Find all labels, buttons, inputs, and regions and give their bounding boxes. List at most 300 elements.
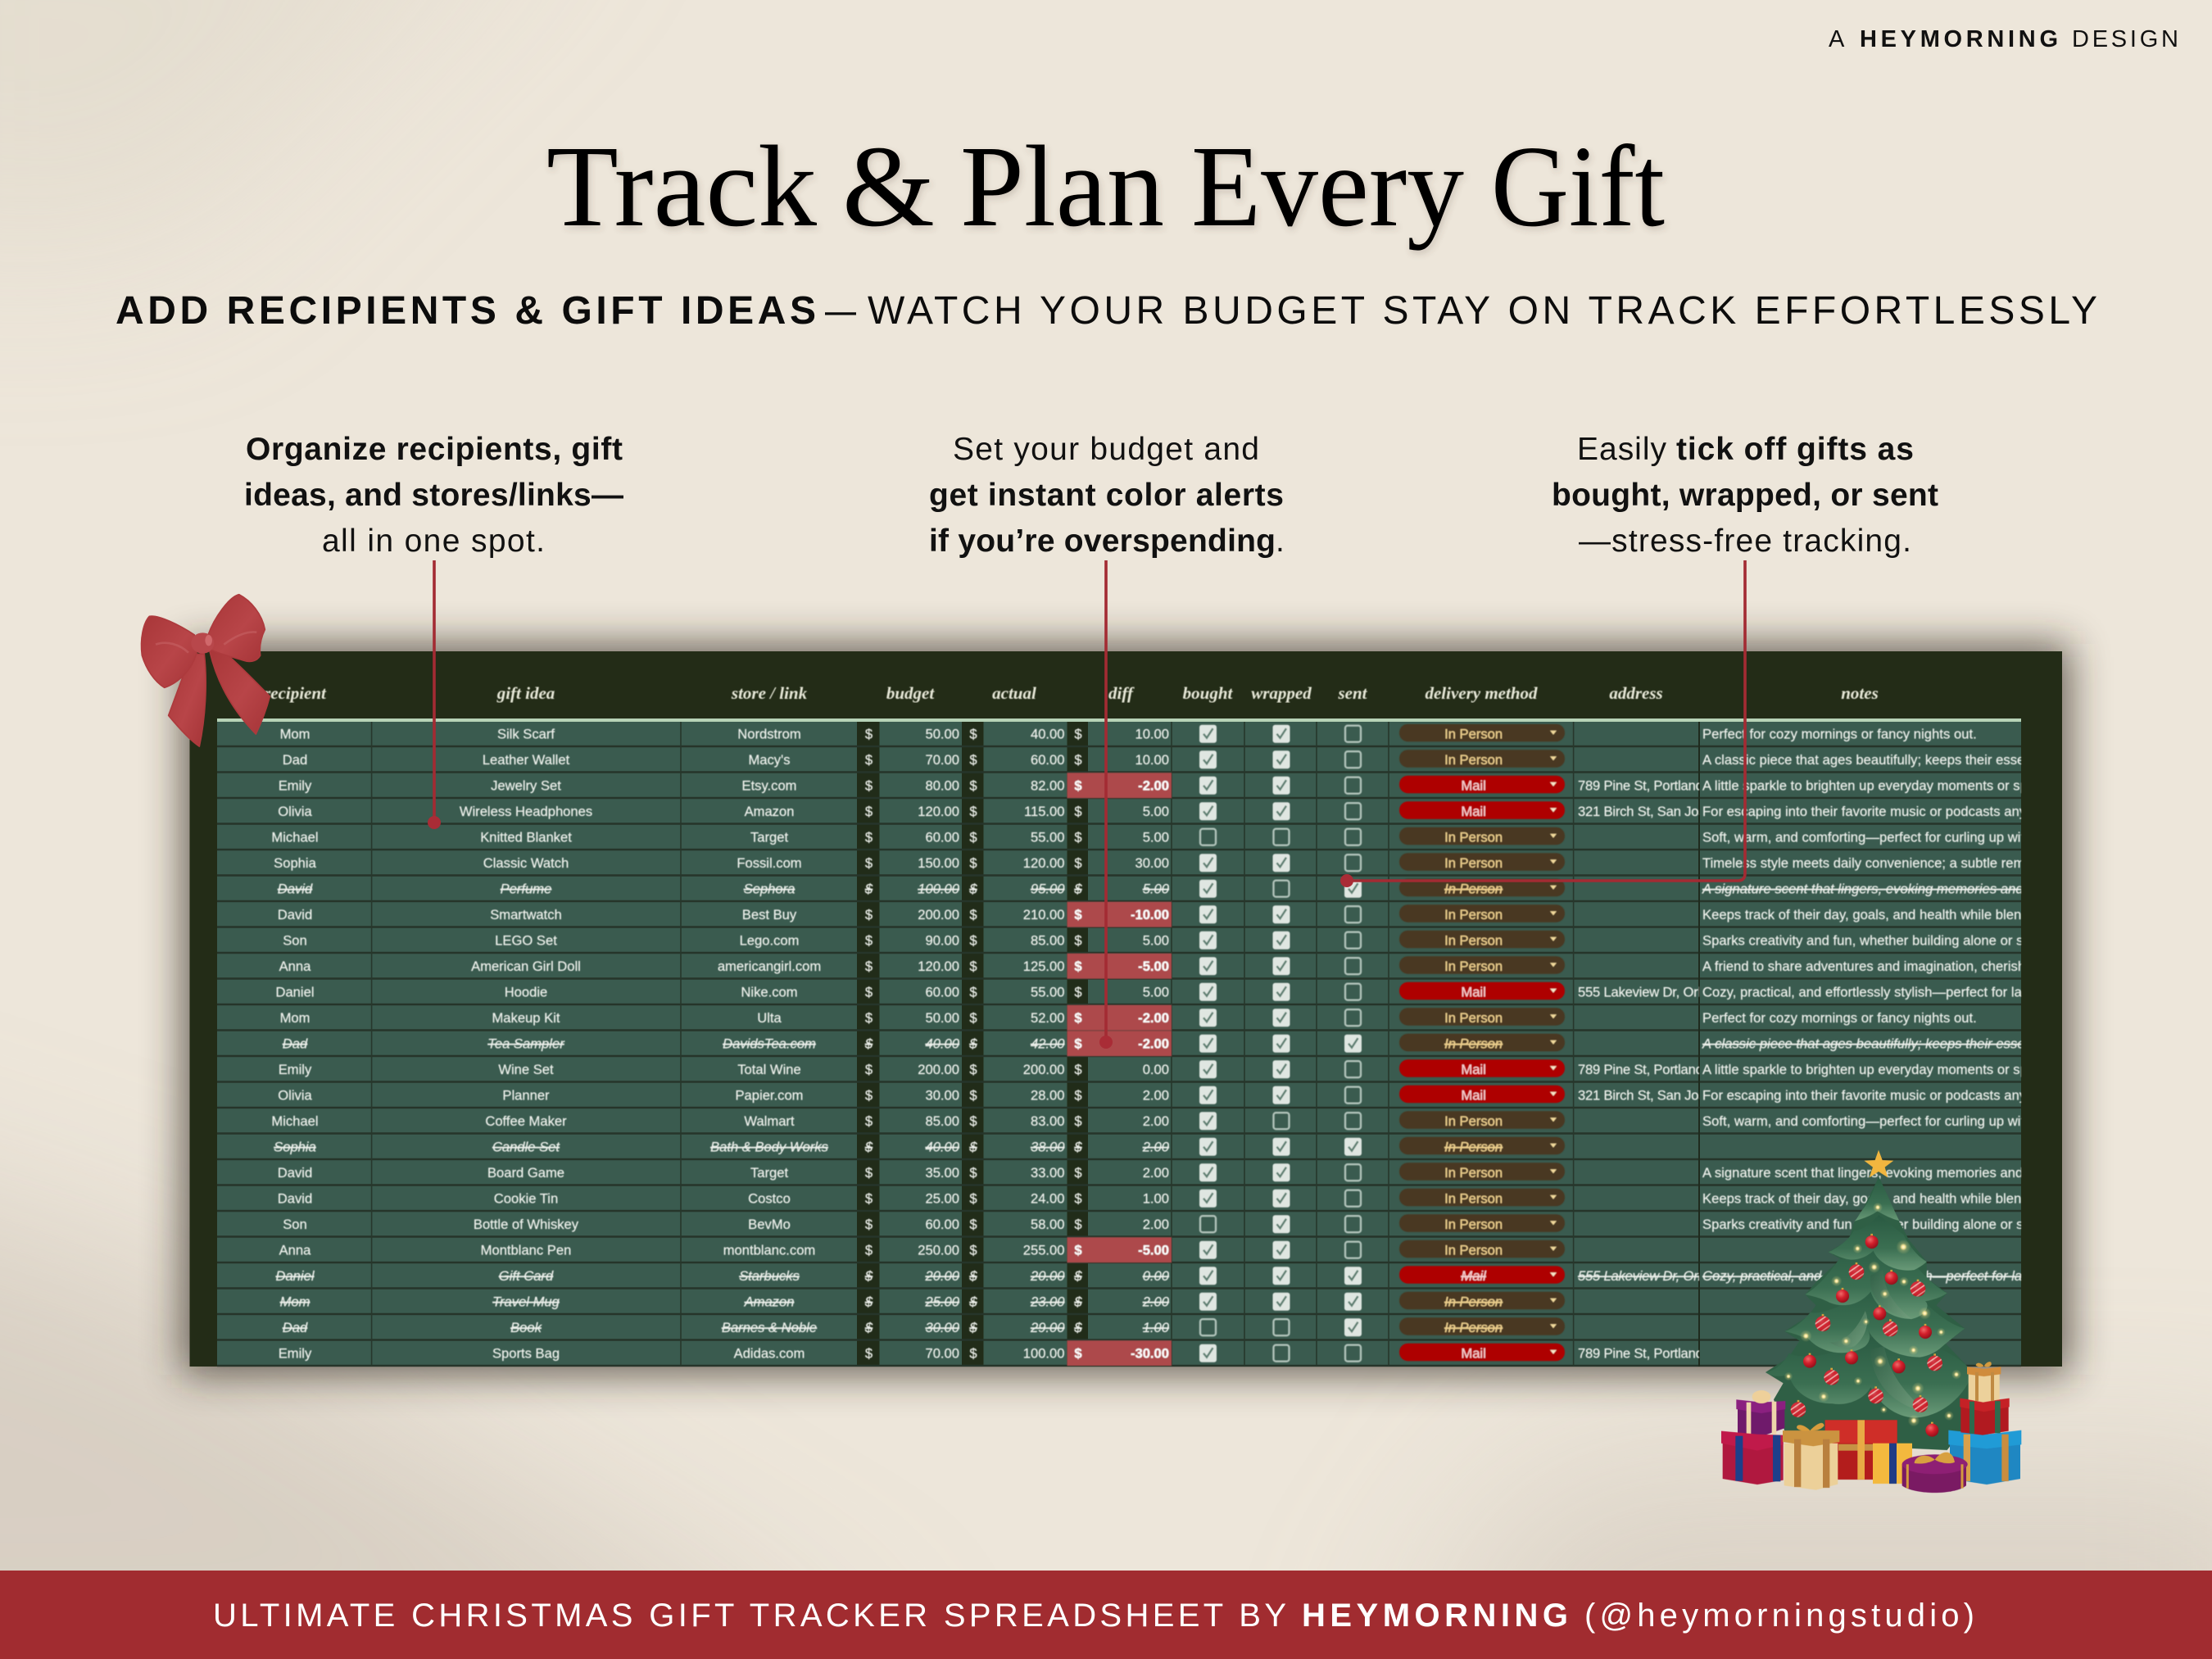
row: Sophia / Candle Set (done)	[274, 1137, 1565, 1156]
row: Son / Bottle of Whiskey: Sparks creativity and fun, whether building alone or sharing.	[1702, 1217, 2065, 1232]
row: Daniel / Hoodie: 55.00	[1031, 985, 1065, 1000]
row: Son / LEGO Set	[283, 931, 2065, 950]
row: Michael / Coffee Maker: 85.00	[925, 1113, 959, 1129]
row: Daniel / Gift Card (done): $	[864, 1268, 873, 1284]
row: Michael / Coffee Maker: 83.00	[1031, 1113, 1065, 1129]
row: David / Cookie Tin: 24.00	[1031, 1191, 1065, 1207]
row: Son / Bottle of Whiskey: Bottle of Whiskey	[474, 1217, 579, 1232]
row: Michael / Knitted Blanket: $	[969, 830, 977, 845]
row: Emily / Wine Set: 200.00	[918, 1062, 959, 1077]
row: Dad / Book (done): $	[968, 1320, 977, 1335]
row: Mom / Makeup Kit: Makeup Kit	[492, 1010, 560, 1026]
row: Mom / Makeup Kit: -2.00	[1138, 1010, 1169, 1026]
row: Olivia / Planner: 28.00	[1031, 1088, 1065, 1104]
row: Mom / Travel Mug (done): 25.00	[924, 1294, 960, 1310]
row: Sophia / Classic Watch: Sophia	[274, 855, 317, 871]
column headers: diff	[1108, 683, 1135, 703]
callout: budget alerts: if you’re overspending	[929, 524, 1276, 559]
row: Daniel / Gift Card (done): 555 Lakeview Dr, Orlando	[1578, 1268, 1730, 1284]
row: Michael / Knitted Blanket: Soft, warm, and comforting—perfect for curling up with a book.	[1702, 830, 2081, 845]
row: Sophia / Candle Set (done): Candle Set	[492, 1140, 560, 1155]
column headers: gift idea	[496, 683, 555, 703]
row: Emily / Jewelry Set: $	[1074, 778, 1082, 794]
row: Olivia / Wireless Headphones: Mail	[1461, 804, 1486, 819]
row: David / Smartwatch: Keeps track of their day, goals, and health while blending in.	[1702, 907, 2065, 922]
row: David / Cookie Tin	[278, 1189, 2065, 1208]
row: Sophia / Classic Watch: Timeless style meets daily convenience; a subtle reminder.	[1702, 855, 2058, 871]
callout: budget alerts: .	[1276, 524, 1285, 559]
row: David / Perfume (done): 5.00	[1143, 882, 1170, 897]
row: Dad / Leather Wallet: In Person	[1444, 752, 1503, 768]
callout: budget alerts: Set your budget and	[953, 432, 1259, 467]
row: Emily / Sports Bag: Adidas.com	[734, 1346, 805, 1362]
row: Emily / Jewelry Set: A little sparkle to brighten up everyday moments or special days.	[1702, 778, 2092, 794]
row: Emily / Wine Set: A little sparkle to brighten up everyday moments or special days.	[1702, 1062, 2092, 1077]
row: Emily / Jewelry Set: 789 Pine St, Portland	[1578, 778, 1703, 794]
row: David / Board Game: David	[278, 1165, 312, 1181]
row: Anna / American Girl Doll: 125.00	[1023, 959, 1065, 974]
row: Michael / Knitted Blanket: In Person	[1444, 830, 1503, 845]
row: Mom / Travel Mug (done): 2.00	[1142, 1294, 1170, 1310]
row: David / Board Game: 33.00	[1031, 1165, 1065, 1181]
row: Daniel / Gift Card (done): $	[968, 1268, 977, 1284]
row: Daniel / Gift Card (done): 20.00	[1030, 1268, 1065, 1284]
row: Emily / Sports Bag: $	[969, 1346, 977, 1362]
row: Emily / Sports Bag: Emily	[279, 1346, 312, 1362]
row: Olivia / Wireless Headphones	[278, 801, 2067, 820]
row: David / Perfume (done): 100.00	[918, 882, 960, 897]
column headers: address	[1609, 683, 1663, 703]
row: Emily / Jewelry Set	[279, 773, 2092, 798]
row: Mom / Travel Mug (done): $	[968, 1294, 977, 1310]
row: David / Cookie Tin: $	[865, 1191, 873, 1207]
panel shadow	[182, 644, 2070, 1375]
row: Emily / Wine Set: $	[865, 1062, 873, 1077]
row: Dad / Tea Sampler (done): -2.00	[1138, 1036, 1169, 1052]
row: Son / LEGO Set: 85.00	[1031, 933, 1065, 949]
row: Olivia / Planner: For escaping into their favorite music or podcasts anywhere.	[1702, 1088, 2067, 1104]
row: Son / LEGO Set: 5.00	[1143, 933, 1169, 949]
table rows	[271, 724, 2101, 1366]
row: David / Smartwatch	[278, 902, 2065, 927]
row: David / Smartwatch: $	[969, 907, 977, 922]
row: Sophia / Classic Watch: 30.00	[1135, 855, 1169, 871]
row: Anna / Montblanc Pen	[279, 1237, 1565, 1262]
row: Daniel / Gift Card (done): Starbucks	[739, 1268, 800, 1284]
row: Michael / Coffee Maker: 2.00	[1143, 1113, 1169, 1129]
row: Mom / Silk Scarf: 40.00	[1031, 727, 1065, 742]
brand credit: DESIGN	[2072, 26, 2178, 52]
row: Dad / Book (done)	[283, 1317, 1565, 1336]
row: Michael / Coffee Maker: Michael	[271, 1113, 319, 1129]
row: Son / LEGO Set: $	[969, 933, 977, 949]
row: Emily / Wine Set: Emily	[279, 1062, 312, 1077]
column headers	[264, 683, 1879, 703]
footer band	[0, 1571, 2212, 1659]
gift: gold cream box	[1783, 1423, 1839, 1490]
row: Sophia / Classic Watch: 120.00	[1023, 855, 1065, 871]
row: David / Cookie Tin: Keeps track of their day, goals, and health while blending in.	[1702, 1191, 2065, 1207]
callout: organize recipients: all in one spot.	[322, 524, 545, 559]
row: Olivia / Wireless Headphones: 115.00	[1024, 804, 1065, 819]
row: Sophia / Classic Watch: 150.00	[918, 855, 959, 871]
row: Emily / Sports Bag: 789 Pine St, Portland	[1578, 1346, 1703, 1362]
gift: crimson box	[1721, 1431, 1784, 1484]
row: David / Board Game: A signature scent that lingers, evoking memories and little joys.	[1702, 1165, 2083, 1181]
row: Dad / Book (done): Dad	[283, 1320, 308, 1335]
callout: tick off gifts: —stress-free tracking.	[1579, 524, 1911, 559]
row: Dad / Tea Sampler (done): A classic piece that ages beautifully; keeps their essentials close.	[1702, 1036, 2096, 1052]
row: Mom / Travel Mug (done): 23.00	[1030, 1294, 1065, 1310]
row: Son / LEGO Set: LEGO Set	[495, 933, 557, 949]
row: Son / LEGO Set: Son	[283, 933, 307, 949]
row: Dad / Tea Sampler (done): $	[864, 1036, 873, 1052]
row: Michael / Coffee Maker: Soft, warm, and comforting—perfect for curling up with a book.	[1702, 1113, 2081, 1129]
row: Sophia / Classic Watch: $	[969, 855, 977, 871]
row: Dad / Leather Wallet: Macy's	[748, 752, 791, 768]
callout: organize recipients: Organize recipients, gift	[246, 432, 623, 467]
row: Mom / Makeup Kit: Ulta	[757, 1010, 782, 1026]
row: Mom / Silk Scarf: Mom	[280, 727, 310, 742]
row: David / Perfume (done): $	[1073, 882, 1082, 897]
row: Sophia / Classic Watch: In Person	[1444, 855, 1503, 871]
row: Michael / Coffee Maker: Coffee Maker	[485, 1113, 567, 1129]
row: Mom / Silk Scarf	[280, 724, 1977, 743]
row: Emily / Jewelry Set: Jewelry Set	[491, 778, 561, 794]
row: Emily / Sports Bag: Sports Bag	[492, 1346, 560, 1362]
row: Michael / Coffee Maker: Walmart	[744, 1113, 795, 1129]
string lights	[1784, 1203, 1961, 1426]
row: Olivia / Wireless Headphones: 120.00	[918, 804, 959, 819]
row: David / Cookie Tin: $	[969, 1191, 977, 1207]
row: Olivia / Planner: Olivia	[278, 1088, 313, 1104]
column headers: actual	[992, 683, 1036, 703]
callout: organize recipients: ideas, and stores/links—	[244, 478, 623, 513]
row: Michael / Knitted Blanket: Target	[750, 830, 788, 845]
row: Emily / Jewelry Set: Etsy.com	[742, 778, 796, 794]
row: Emily / Sports Bag: 70.00	[925, 1346, 959, 1362]
row: David / Smartwatch: Smartwatch	[490, 907, 562, 922]
row: Dad / Leather Wallet: $	[865, 752, 873, 768]
row: Mom / Silk Scarf: Nordstrom	[737, 727, 801, 742]
subtitle: ADD RECIPIENTS & GIFT IDEAS	[116, 289, 816, 333]
row: Dad / Book (done): In Person	[1444, 1320, 1503, 1335]
row: David / Smartwatch: Best Buy	[742, 907, 797, 922]
row: Olivia / Planner: Papier.com	[735, 1088, 804, 1104]
row: Son / Bottle of Whiskey: BevMo	[748, 1217, 791, 1232]
row: Michael / Knitted Blanket: Knitted Blanket	[480, 830, 572, 845]
row: Olivia / Wireless Headphones: $	[865, 804, 873, 819]
row: Dad / Book (done): Barnes & Noble	[722, 1320, 817, 1335]
row: Michael / Coffee Maker: $	[865, 1113, 873, 1129]
row: David / Board Game: Board Game	[487, 1165, 564, 1181]
row: Sophia / Candle Set (done): $	[1073, 1140, 1082, 1155]
row: Olivia / Wireless Headphones: Amazon	[745, 804, 794, 819]
row: Michael / Coffee Maker: $	[969, 1113, 977, 1129]
row: Daniel / Hoodie: Mail	[1461, 985, 1486, 1000]
title: Plan	[960, 121, 1164, 251]
row: Michael / Knitted Blanket: Michael	[271, 830, 319, 845]
row: Olivia / Planner	[278, 1086, 2067, 1104]
row: Olivia / Planner: $	[865, 1088, 873, 1104]
row: Mom / Travel Mug (done)	[280, 1292, 1565, 1311]
row: Mom / Makeup Kit: 52.00	[1031, 1010, 1065, 1026]
row: Mom / Silk Scarf: $	[1074, 727, 1082, 742]
row: Emily / Sports Bag: $	[1074, 1346, 1082, 1362]
tree tiers	[1766, 1177, 1973, 1417]
callout: budget alerts: get instant color alerts	[929, 478, 1284, 513]
row: Son / LEGO Set: Lego.com	[740, 933, 799, 949]
row: Michael / Knitted Blanket: 55.00	[1031, 830, 1065, 845]
row: David / Board Game: Target	[750, 1165, 788, 1181]
row: Olivia / Planner: Planner	[502, 1088, 550, 1104]
row: Dad / Leather Wallet: $	[1074, 752, 1082, 768]
row: David / Smartwatch: David	[278, 907, 312, 922]
row: David / Smartwatch: $	[1074, 907, 1082, 922]
row: Daniel / Gift Card (done): Mail	[1461, 1268, 1487, 1284]
row: Michael / Coffee Maker: $	[1074, 1113, 1082, 1129]
row: Son / Bottle of Whiskey: $	[969, 1217, 977, 1232]
row: Anna / American Girl Doll: A friend to share adventures and imagination, cherished for years.	[1702, 959, 2101, 974]
row: Michael / Knitted Blanket	[271, 827, 2081, 845]
row: Olivia / Wireless Headphones: For escaping into their favorite music or podcasts anywhere.	[1702, 804, 2067, 819]
row: David / Smartwatch: $	[865, 907, 873, 922]
row: Olivia / Wireless Headphones: 321 Birch St, San Jose	[1578, 804, 1712, 819]
row: Sophia / Classic Watch: Fossil.com	[737, 855, 802, 871]
row: David / Cookie Tin: 25.00	[925, 1191, 959, 1207]
row: Dad / Leather Wallet: 70.00	[925, 752, 959, 768]
row: Michael / Coffee Maker	[271, 1111, 2081, 1130]
row: Emily / Sports Bag: -30.00	[1131, 1346, 1169, 1362]
row: Mom / Silk Scarf: Perfect for cozy mornings or fancy nights out.	[1702, 727, 1977, 742]
row: Daniel / Hoodie: 555 Lakeview Dr, Orlando	[1578, 985, 1730, 1000]
row: David / Perfume (done): Perfume	[501, 882, 551, 897]
subtitle: —	[825, 289, 856, 333]
row: Anna / American Girl Doll: 120.00	[918, 959, 959, 974]
row: Daniel / Hoodie: Nike.com	[741, 985, 798, 1000]
footer band: ULTIMATE CHRISTMAS GIFT TRACKER SPREADSHEET BY	[213, 1598, 1286, 1634]
row: David / Board Game: $	[1074, 1165, 1082, 1181]
row: Mom / Makeup Kit: $	[865, 1010, 873, 1026]
row: Michael / Knitted Blanket: 60.00	[925, 830, 959, 845]
callout: organize recipients	[244, 432, 623, 559]
row: Dad / Leather Wallet	[283, 750, 2096, 768]
row: Sophia / Candle Set (done): 40.00	[925, 1140, 960, 1155]
row: David / Smartwatch: -10.00	[1131, 907, 1169, 922]
row: Dad / Book (done): 29.00	[1030, 1320, 1065, 1335]
row: Olivia / Wireless Headphones: Wireless Headphones	[460, 804, 592, 819]
row: Emily / Sports Bag	[279, 1340, 1703, 1366]
row: Daniel / Hoodie	[275, 982, 2072, 1001]
row: David / Cookie Tin: David	[278, 1191, 312, 1207]
row: Mom / Makeup Kit: 50.00	[925, 1010, 959, 1026]
row: Son / Bottle of Whiskey: In Person	[1444, 1217, 1503, 1232]
row: Dad / Leather Wallet: 60.00	[1031, 752, 1065, 768]
row: Emily / Sports Bag: Mail	[1461, 1346, 1486, 1362]
row: Son / Bottle of Whiskey: $	[1074, 1217, 1082, 1232]
row: Sophia / Classic Watch: $	[1074, 855, 1082, 871]
row: Dad / Leather Wallet: 10.00	[1135, 752, 1169, 768]
row: David / Board Game: $	[969, 1165, 977, 1181]
row: Mom / Silk Scarf: In Person	[1444, 727, 1503, 742]
gift: purple round box	[1902, 1453, 1968, 1493]
row: Daniel / Gift Card (done): Gift Card	[499, 1268, 554, 1284]
gift: red back box	[1825, 1420, 1897, 1480]
row: Anna / Montblanc Pen: $	[1074, 1243, 1082, 1258]
row: Emily / Wine Set: Mail	[1461, 1062, 1486, 1077]
title: &	[842, 121, 935, 251]
row: Anna / American Girl Doll	[279, 954, 2101, 979]
footer band: (@heymorningstudio)	[1584, 1598, 1974, 1634]
row: Son / Bottle of Whiskey: 60.00	[925, 1217, 959, 1232]
row: Sophia / Candle Set (done): $	[968, 1140, 977, 1155]
row: David / Board Game: 35.00	[925, 1165, 959, 1181]
row: Son / Bottle of Whiskey: $	[865, 1217, 873, 1232]
row: Son / LEGO Set: 90.00	[925, 933, 959, 949]
row: Dad / Leather Wallet: $	[969, 752, 977, 768]
row: Dad / Tea Sampler (done): DavidsTea.com	[723, 1036, 816, 1052]
row: Olivia / Planner: 2.00	[1143, 1088, 1169, 1104]
row: David / Perfume (done): Sephora	[744, 882, 795, 897]
row: Emily / Jewelry Set: Mail	[1461, 778, 1486, 794]
row: Daniel / Hoodie: Cozy, practical, and effortlessly stylish—perfect for lazy days.	[1702, 985, 2072, 1000]
row: Emily / Sports Bag: $	[865, 1346, 873, 1362]
row: David / Cookie Tin: Cookie Tin	[494, 1191, 558, 1207]
row: Anna / Montblanc Pen: 250.00	[918, 1243, 959, 1258]
row: Emily / Jewelry Set: 80.00	[925, 778, 959, 794]
row: Emily / Jewelry Set: 82.00	[1031, 778, 1065, 794]
row: Anna / American Girl Doll: -5.00	[1138, 959, 1169, 974]
row: Emily / Jewelry Set: $	[969, 778, 977, 794]
row: Mom / Travel Mug (done): In Person	[1444, 1294, 1503, 1310]
row: Mom / Makeup Kit	[280, 1005, 1977, 1031]
row: David / Board Game	[278, 1163, 2083, 1181]
row: David / Cookie Tin: In Person	[1444, 1191, 1503, 1207]
column headers: budget	[886, 683, 935, 703]
row: Daniel / Hoodie: Daniel	[275, 985, 315, 1000]
row: Mom / Makeup Kit: $	[1074, 1010, 1082, 1026]
row: Sophia / Candle Set (done): 2.00	[1142, 1140, 1170, 1155]
row: Anna / American Girl Doll: $	[1074, 959, 1082, 974]
row: Emily / Sports Bag: 100.00	[1023, 1346, 1065, 1362]
subtitle: WATCH YOUR BUDGET STAY ON TRACK EFFORTLESSLY	[868, 289, 2097, 333]
row: Sophia / Classic Watch: $	[865, 855, 873, 871]
row: Emily / Wine Set: 200.00	[1023, 1062, 1065, 1077]
row: Son / Bottle of Whiskey: 2.00	[1143, 1217, 1169, 1232]
row: David / Perfume (done): A signature scent that lingers, evoking memories and little joys.	[1702, 882, 2083, 897]
row: Emily / Jewelry Set: -2.00	[1138, 778, 1169, 794]
brand credit: A	[1829, 26, 1845, 52]
column headers: store / link	[731, 683, 808, 703]
gift: yellow box	[1873, 1444, 1912, 1484]
row: Dad / Book (done): $	[864, 1320, 873, 1335]
row: David / Smartwatch: 210.00	[1023, 907, 1065, 922]
brand credit	[1829, 26, 2178, 52]
row: Emily / Wine Set: Total Wine	[737, 1062, 801, 1077]
row: Emily / Wine Set: 789 Pine St, Portland	[1578, 1062, 1703, 1077]
row: Mom / Travel Mug (done): $	[1073, 1294, 1082, 1310]
row: Mom / Travel Mug (done): Travel Mug	[492, 1294, 560, 1310]
gift: blue box	[1948, 1430, 2021, 1484]
row: Daniel / Hoodie: 5.00	[1143, 985, 1169, 1000]
arrow: recipients connector	[428, 560, 441, 829]
row: Emily / Wine Set: Wine Set	[498, 1062, 554, 1077]
row: Son / LEGO Set: Sparks creativity and fun, whether building alone or sharing.	[1702, 933, 2065, 949]
row: Dad / Leather Wallet: A classic piece that ages beautifully; keeps their essentials close.	[1702, 752, 2096, 768]
row: Sophia / Candle Set (done): Sophia	[274, 1140, 316, 1155]
row: Son / LEGO Set: $	[865, 933, 873, 949]
row: Emily / Jewelry Set: Emily	[279, 778, 312, 794]
row: Michael / Knitted Blanket: $	[1074, 830, 1082, 845]
row: Daniel / Gift Card (done): 20.00	[924, 1268, 960, 1284]
row: Olivia / Wireless Headphones: Olivia	[278, 804, 313, 819]
row: Mom / Travel Mug (done): Mom	[280, 1294, 310, 1310]
row: David / Perfume (done): $	[968, 882, 977, 897]
row: Emily / Wine Set: 0.00	[1143, 1062, 1169, 1077]
row: Anna / Montblanc Pen: Anna	[279, 1243, 311, 1258]
callout: tick off gifts	[1552, 432, 1938, 559]
row: Mom / Makeup Kit: Mom	[280, 1010, 310, 1026]
row: David / Cookie Tin: $	[1074, 1191, 1082, 1207]
row: Dad / Leather Wallet: Dad	[283, 752, 307, 768]
row: David / Perfume (done): 95.00	[1031, 882, 1065, 897]
row: Emily / Wine Set	[279, 1059, 2092, 1078]
gift: purple top-left box	[1736, 1390, 1785, 1436]
title	[546, 121, 1665, 251]
column headers: notes	[1841, 683, 1879, 703]
row: Daniel / Gift Card (done)	[275, 1266, 2072, 1285]
row: Sophia / Candle Set (done): In Person	[1444, 1140, 1503, 1155]
column headers: recipient	[264, 683, 327, 703]
row: Olivia / Wireless Headphones: 5.00	[1143, 804, 1169, 819]
row: Dad / Tea Sampler (done): $	[968, 1036, 977, 1052]
row: David / Perfume (done)	[278, 879, 2083, 898]
row: Daniel / Hoodie: $	[1074, 985, 1082, 1000]
row: Sophia / Candle Set (done): 38.00	[1031, 1140, 1065, 1155]
column headers: bought	[1183, 683, 1234, 703]
row: Son / Bottle of Whiskey	[283, 1214, 2065, 1233]
row: Dad / Tea Sampler (done): 40.00	[925, 1036, 960, 1052]
row: Sophia / Candle Set (done): Bath & Body Works	[710, 1140, 828, 1155]
icon: christmas tree	[1721, 1150, 2021, 1493]
row: Anna / Montblanc Pen: $	[969, 1243, 977, 1258]
row: Dad / Tea Sampler (done)	[283, 1031, 2096, 1056]
row: Daniel / Gift Card (done): 0.00	[1143, 1268, 1170, 1284]
row: Anna / Montblanc Pen: -5.00	[1138, 1243, 1169, 1258]
row: Dad / Tea Sampler (done): $	[1074, 1036, 1082, 1052]
row: David / Perfume (done): David	[278, 882, 313, 897]
row: Anna / Montblanc Pen: $	[865, 1243, 873, 1258]
row: Mom / Makeup Kit: $	[969, 1010, 977, 1026]
row: Anna / American Girl Doll: American Girl Doll	[471, 959, 581, 974]
row: Sophia / Classic Watch	[274, 853, 2058, 872]
ornaments	[1791, 1234, 1942, 1437]
row: Emily / Jewelry Set: $	[865, 778, 873, 794]
row: Anna / American Girl Doll: $	[865, 959, 873, 974]
title: Gift	[1491, 121, 1665, 251]
row: Dad / Book (done): 1.00	[1143, 1320, 1170, 1335]
column headers: wrapped	[1251, 683, 1312, 703]
row: Mom / Travel Mug (done): Amazon	[744, 1294, 794, 1310]
row: Olivia / Wireless Headphones: $	[1074, 804, 1082, 819]
callout: tick off gifts: bought, wrapped, or sent	[1552, 478, 1938, 513]
row: David / Smartwatch: 200.00	[918, 907, 959, 922]
row: David / Board Game: In Person	[1444, 1165, 1503, 1181]
row: Mom / Travel Mug (done): $	[864, 1294, 873, 1310]
title: Every	[1191, 121, 1464, 251]
row: Olivia / Wireless Headphones: $	[969, 804, 977, 819]
row: Mom / Silk Scarf: $	[865, 727, 873, 742]
